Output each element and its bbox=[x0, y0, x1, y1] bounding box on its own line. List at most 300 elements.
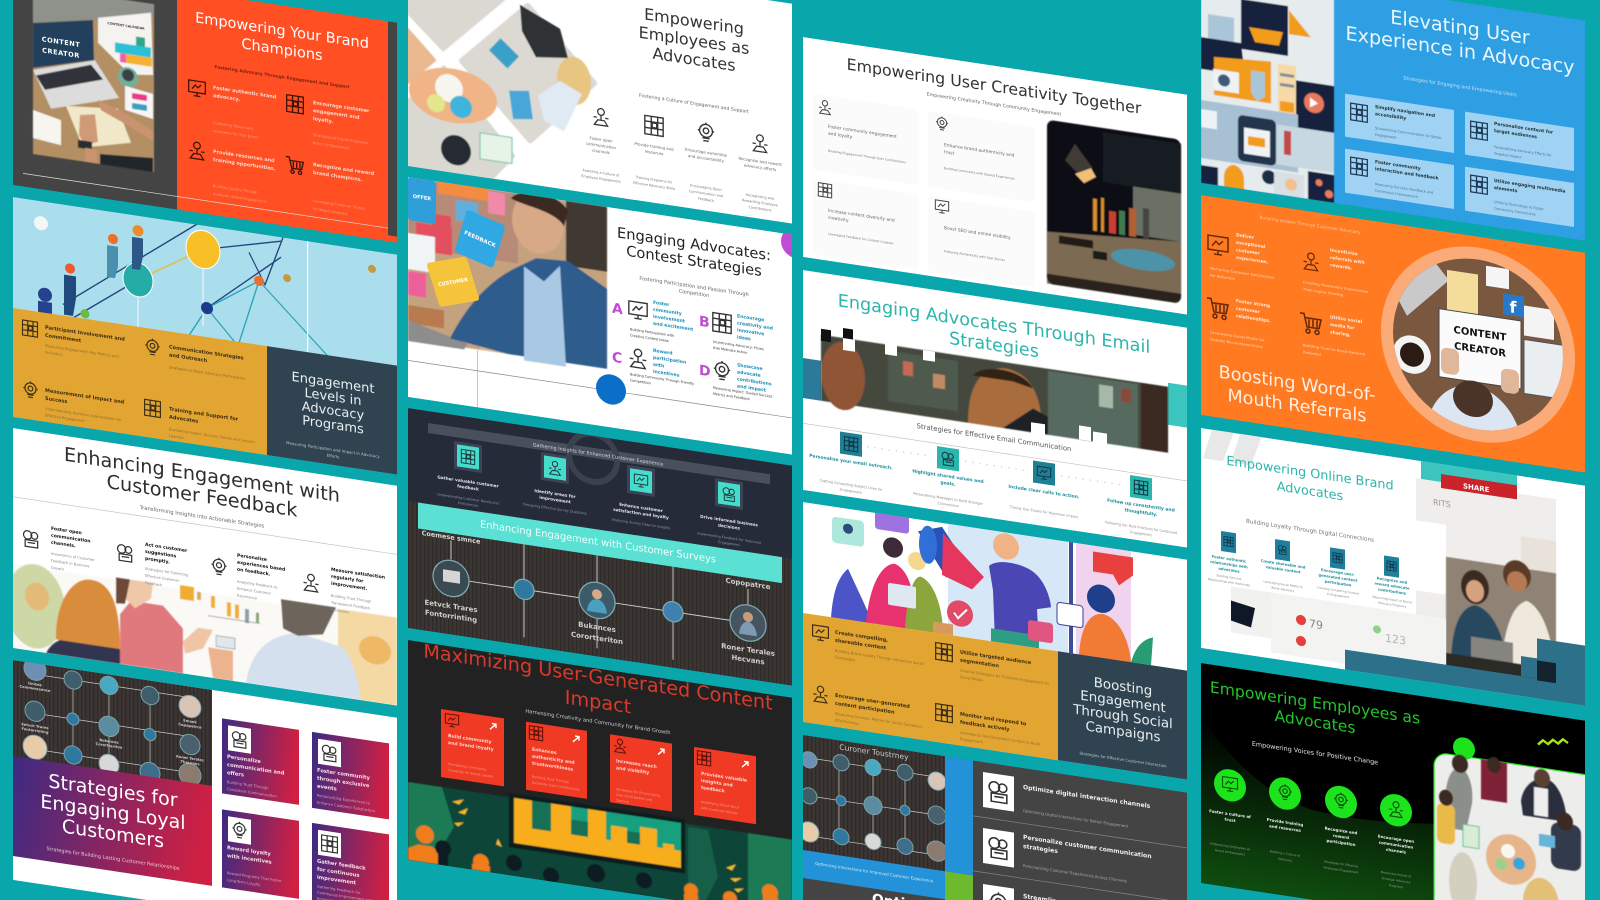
item: personalize outreach: Personalize your email outreach. bbox=[809, 453, 893, 471]
item: recognize: Employee Engagement bbox=[1324, 865, 1359, 875]
photo: customer journey network: Eetvck Trares bbox=[21, 722, 49, 730]
photo: customer journey network: Fontorrinting bbox=[22, 727, 49, 735]
card: brand authenticity: Building Community with Shared Experiences bbox=[944, 166, 1015, 181]
slide: Empowering User Creativity Together bbox=[803, 37, 1187, 315]
photo: people and social metrics: SHARE bbox=[1463, 481, 1490, 494]
item: open communication: Encourage open bbox=[1378, 834, 1414, 844]
item: personalize bbox=[212, 553, 285, 600]
photo: people and social metrics: RITS bbox=[1433, 498, 1451, 509]
photo: customer journey network: Roner Terales bbox=[176, 754, 204, 763]
title: Mouth Referrals bbox=[1228, 386, 1366, 427]
card: SEO bbox=[928, 196, 1035, 288]
card: personalize communication: offers bbox=[227, 770, 244, 779]
panel: title: Customers bbox=[62, 814, 164, 853]
title: Empowering User Creativity Together bbox=[847, 55, 1142, 118]
item B: that Motivate Action bbox=[713, 346, 747, 355]
item: shareable content: Boost Advocacy bbox=[1272, 586, 1295, 593]
card: community engagement bbox=[813, 94, 918, 185]
item: measurement bbox=[23, 381, 124, 422]
card: reach: Increases reach bbox=[616, 758, 657, 770]
card: personalize communication: Personalize bbox=[227, 754, 261, 765]
item: training: Training Programs for bbox=[635, 175, 673, 185]
card: gather feedback: Gather feedback bbox=[317, 859, 366, 872]
card: reach bbox=[610, 734, 672, 812]
item: social sharing: Potential bbox=[1303, 350, 1321, 357]
item B: creativity and bbox=[737, 320, 773, 332]
item A: A bbox=[612, 301, 623, 318]
item C: Building Community Through Friendly bbox=[630, 372, 694, 386]
photo: content creator desk: CONTENT CALENDAR bbox=[107, 21, 145, 31]
item: resources and training: training opportunities. bbox=[213, 157, 276, 172]
item: training: Effective Advocacy Skills bbox=[633, 181, 675, 191]
card: authenticity bbox=[526, 722, 587, 799]
item A: Creative Contest Ideas bbox=[630, 333, 669, 343]
photo: man with feedback tags: OFFER bbox=[413, 194, 431, 202]
slide: Optimizing customer interactions bbox=[799, 734, 1187, 900]
subtitle: Fostering a Culture of Engagement and Support bbox=[639, 93, 749, 115]
item: authentic advocacy: Foster authentic brand bbox=[213, 85, 277, 101]
item: recognize: Recognizing and bbox=[746, 193, 774, 201]
item: communication bbox=[145, 338, 245, 381]
card: authenticity: authenticity and bbox=[532, 754, 575, 766]
card: target audiences: target audiences bbox=[1494, 128, 1537, 140]
photo: team in rounded diamonds bbox=[408, 0, 598, 179]
photo: content creator desk: CREATOR bbox=[42, 46, 80, 60]
item: user generated: to Engagement bbox=[1327, 592, 1350, 599]
item: drive decisions: Drive informed business bbox=[700, 514, 758, 528]
item: open channels: Foster open bbox=[590, 135, 613, 144]
item D: and impact bbox=[737, 383, 767, 394]
item: user generated: Measuring Success: Metrics for Social Campaign bbox=[835, 712, 922, 729]
item: audience segmentation: Social Media bbox=[960, 675, 983, 682]
photo: customer journey network: Corortteriton bbox=[96, 742, 123, 750]
item B bbox=[699, 308, 773, 359]
item: social sharing: Building Trust to Boost Referral bbox=[1303, 343, 1365, 357]
card: insights: Provides valuable bbox=[701, 771, 747, 784]
item: training: Provide training and bbox=[634, 141, 674, 152]
card: multimedia: elements bbox=[1494, 185, 1518, 194]
item: identify areas: Designing Effective Survey Questions bbox=[523, 502, 587, 516]
card: content diversity bbox=[813, 178, 918, 270]
photo: customer journey network: Commeresence bbox=[20, 684, 51, 693]
slide: Maximizing User-Generated Content Impact bbox=[408, 637, 792, 900]
item C: Reward bbox=[653, 348, 673, 357]
item: personalize: experiences based bbox=[237, 560, 285, 573]
card: target audiences: Personalize content for bbox=[1494, 121, 1554, 136]
item: recognize: Contributions bbox=[749, 205, 772, 213]
subtitle: Building Loyalty Through Digital Connections bbox=[1246, 519, 1374, 544]
card: community interaction: Measuring Success: Feedback and bbox=[1375, 182, 1433, 195]
panel: title bbox=[267, 346, 397, 475]
background: green curve bbox=[1201, 718, 1441, 900]
card: community engagement: Foster community engagement bbox=[828, 124, 897, 140]
item: ownership: Encouraging Open bbox=[690, 183, 722, 192]
photo: journey network: Copopatrce bbox=[725, 576, 771, 591]
item: open communication: Feedback in Business bbox=[51, 559, 90, 568]
item: follow up bbox=[1105, 471, 1177, 541]
item D: Showcase bbox=[737, 362, 763, 372]
panel: amber items bbox=[803, 613, 1058, 760]
item D: Metrics and Feedback bbox=[713, 392, 750, 401]
item: open communication: Foster open bbox=[51, 526, 82, 536]
item: exceptional experiences: for Referrals bbox=[1210, 273, 1235, 281]
item: recognize: Rewarding Employee bbox=[742, 198, 778, 207]
item: user generated: Effectiveness bbox=[835, 718, 859, 726]
item: open communication bbox=[22, 526, 95, 570]
decoration: blue circle bbox=[596, 372, 626, 407]
item: shareable content: valuable content bbox=[1265, 565, 1301, 574]
card: exclusive events: events bbox=[317, 784, 337, 793]
card: insights: Amplifying Brand Voice bbox=[701, 800, 739, 810]
item: user generated bbox=[1317, 545, 1360, 601]
item: ownership: and accountability bbox=[688, 153, 725, 163]
item: personalize: Enhance Customer bbox=[237, 587, 272, 596]
item: act on suggestions: promptly. bbox=[145, 556, 170, 566]
item: recognize: reward advocate bbox=[1374, 582, 1410, 591]
item: recognize: Advocacy Programs bbox=[1378, 601, 1407, 609]
item C: Competition bbox=[630, 378, 651, 385]
item: open communication: communication bbox=[51, 533, 91, 545]
card: navigation bbox=[1345, 94, 1454, 153]
item: social sharing: Utilize social bbox=[1330, 314, 1363, 325]
card: community interaction: interaction and feedback bbox=[1375, 166, 1440, 182]
card: community interaction: Foster community bbox=[1375, 159, 1421, 172]
title: Employees as bbox=[639, 23, 749, 58]
photo: journey network: Corortteriton bbox=[571, 629, 623, 646]
card: personalize communication: Building Trust Through bbox=[227, 780, 269, 790]
title: Customer Feedback bbox=[107, 470, 298, 522]
slide: Empowering Employees as Advocates bbox=[408, 0, 792, 224]
item B: innovative bbox=[737, 327, 764, 337]
item: recognize champions bbox=[286, 156, 375, 220]
item: open channels: communication bbox=[586, 141, 617, 150]
item: engagement and loyalty: Encourage customer bbox=[313, 100, 370, 115]
item: drive decisions: decisions bbox=[718, 523, 741, 531]
item: monitor feedback: Leveraging User-Generated Content to Build bbox=[960, 731, 1040, 747]
item: compelling content bbox=[813, 625, 924, 673]
title: Enhancing Engagement with bbox=[64, 443, 340, 507]
item: open communication: channels bbox=[1386, 847, 1407, 855]
card: personalize communication bbox=[222, 718, 299, 805]
card: navigation: accessibility bbox=[1375, 111, 1406, 122]
item: participant involvement: Participant Involvement and bbox=[45, 325, 125, 343]
photo: customer journey network: Curoner Toustrney bbox=[839, 742, 909, 762]
photo: workshop circle bbox=[1434, 733, 1600, 900]
item: culture of trust: Empowering Employees as bbox=[1210, 841, 1251, 851]
panel: title bbox=[13, 756, 212, 886]
item: exceptional experiences: customer bbox=[1236, 247, 1260, 257]
panel: title: Efforts bbox=[327, 453, 339, 459]
item: enhance satisfaction: satisfaction and loyalty bbox=[613, 507, 669, 520]
item: identify areas: improvement bbox=[539, 495, 571, 504]
item: incentivize bbox=[1303, 243, 1368, 301]
panel: amber items bbox=[13, 308, 268, 455]
card: brand authenticity: Enhance brand authenticity and bbox=[944, 142, 1015, 159]
item: authentic relationships: Foster authentic bbox=[1212, 555, 1246, 564]
photo: man with feedback tags bbox=[408, 172, 607, 373]
subtitle: Empowering Creativity Through Community Engagement bbox=[927, 92, 1061, 118]
row: personalize communication: strategies bbox=[1023, 843, 1058, 855]
item: incentivize: referrals with bbox=[1330, 255, 1365, 266]
item: incentivize: Incentivize bbox=[1330, 247, 1358, 257]
item: recognize: Measuring Impact of Brand bbox=[1372, 595, 1412, 605]
title: Contest Strategies bbox=[626, 243, 762, 280]
row: personalize communication: Personalizing Customer Experiences Across Channels bbox=[1023, 863, 1127, 884]
slide: Boosting Word-of-Mouth Referrals bbox=[1201, 195, 1585, 473]
item: ownership: Encourage ownership bbox=[685, 147, 728, 158]
item: audience segmentation: segmentation bbox=[960, 658, 999, 669]
card: content diversity: creativity bbox=[828, 215, 849, 224]
photo: customer journey network: Copopatrce bbox=[178, 722, 202, 730]
item: communication: Communication Strategies bbox=[169, 344, 244, 362]
title: Advocates bbox=[652, 44, 736, 75]
item: audience segmentation bbox=[936, 643, 1049, 692]
decoration: zigzag bbox=[1538, 736, 1568, 749]
item: participant involvement bbox=[22, 319, 124, 358]
item: compelling content: shareable content bbox=[835, 638, 887, 652]
item: open channels: channels bbox=[592, 148, 610, 155]
illustration: people with megaphone bbox=[831, 504, 1153, 666]
card: exclusive events: through exclusive bbox=[317, 776, 370, 790]
title: Elevating User bbox=[1390, 5, 1530, 49]
item: ownership: Feedback bbox=[698, 197, 714, 203]
item: measure satisfaction: improvement. bbox=[331, 581, 367, 592]
card: authenticity: Building Trust Through bbox=[532, 775, 569, 784]
item: open channels: Employee Engagement bbox=[581, 174, 621, 184]
item: culture of trust: Brand Ambassadors bbox=[1215, 848, 1245, 857]
subtitle: Boosting Growth Through Customer Advocacy bbox=[1259, 215, 1361, 236]
photo: journey network: Coemese smnce bbox=[422, 529, 481, 546]
item: drive decisions bbox=[697, 475, 761, 550]
item: exceptional experiences: Deliver bbox=[1236, 232, 1255, 241]
photo: people and social metrics bbox=[1231, 432, 1556, 695]
item: user generated: generated content bbox=[1319, 573, 1358, 583]
subtitle: Competition bbox=[679, 289, 709, 299]
item: identify areas: Identify areas for bbox=[534, 488, 576, 499]
slide: Elevating User Experience in Advocacy bbox=[1201, 0, 1585, 241]
panel: title: Programs bbox=[302, 413, 364, 438]
panel: title: Measuring Participation and Impact in Advocacy bbox=[286, 440, 380, 459]
title: Maximizing User-Generated Content bbox=[423, 639, 773, 715]
item: incentivize: Creating Memorable Experiences bbox=[1303, 280, 1368, 294]
item: recognize champions: for Brand Advocacy bbox=[313, 207, 349, 216]
card: community: Harnessing Community bbox=[448, 762, 486, 772]
item: resources and training bbox=[190, 141, 276, 205]
photo: content creator desk bbox=[33, 0, 154, 172]
item: identify areas bbox=[523, 449, 587, 516]
item: gather feedback: Gather valuable customer bbox=[437, 474, 500, 489]
item: authentic advocacy: advocacy. bbox=[213, 93, 240, 103]
item: recognize champions: Recognize and reward bbox=[313, 162, 375, 177]
item: training: resources bbox=[645, 149, 663, 156]
slide: Enhancing Engagement with Customer Surveys bbox=[408, 406, 792, 686]
item: engagement and loyalty bbox=[287, 95, 370, 154]
item: social sharing bbox=[1300, 310, 1365, 364]
item: training: Training and Support for bbox=[169, 406, 239, 423]
panel: title: Strategies for Building Lasting Customer Relationships bbox=[46, 846, 180, 872]
item: recognize bbox=[1372, 554, 1412, 610]
item: enhance satisfaction bbox=[612, 463, 671, 530]
item: enhance satisfaction: Enhance customer bbox=[619, 502, 664, 513]
item C: incentives bbox=[653, 369, 680, 379]
band: survey title: Enhancing Engagement with Customer Surveys bbox=[480, 519, 716, 566]
card: gather feedback bbox=[312, 823, 389, 900]
item: monitor feedback: Engagement bbox=[960, 737, 983, 745]
item: gather feedback: feedback bbox=[457, 483, 479, 492]
illustration: jungle audience with chart bbox=[408, 778, 792, 900]
card: insights: insights and bbox=[701, 778, 733, 789]
slide: Strategies for Engaging Loyal Customers bbox=[13, 655, 397, 900]
item: relationships bbox=[1207, 294, 1271, 351]
panel: title: Strategies for Effective Customer Interaction bbox=[1079, 750, 1167, 769]
item: gather feedback: Preferences bbox=[458, 501, 478, 508]
card: reward loyalty: Reward loyalty bbox=[227, 845, 271, 858]
card: target audiences: Targeted Impact bbox=[1493, 151, 1522, 160]
item: follow up: thoughtfully. bbox=[1125, 507, 1158, 518]
item: relationships: relationships. bbox=[1236, 313, 1271, 325]
decoration: grey quote mark bbox=[1203, 418, 1265, 468]
item: exceptional experiences bbox=[1208, 228, 1274, 287]
photo: man with feedback tags: CUSTOMER bbox=[438, 277, 469, 288]
item: training: Advocacy bbox=[1278, 857, 1292, 863]
item: follow up: Following Up: Best Practices for Continued bbox=[1105, 520, 1177, 535]
photo: journey network: Hecvans bbox=[731, 653, 765, 666]
item: culture of trust bbox=[1209, 766, 1251, 858]
item: follow up: Engagement bbox=[1130, 530, 1152, 537]
title: Advocates bbox=[1275, 706, 1355, 737]
column 4 bbox=[1201, 0, 1600, 900]
card: navigation: Engagement bbox=[1375, 133, 1397, 140]
card: community engagement: Boosting Engagement Through User Contributions bbox=[828, 149, 906, 164]
panel: title: Strategies for bbox=[48, 769, 178, 812]
item: authentic relationships: Relationships with Advocates bbox=[1208, 577, 1251, 587]
item: training bbox=[633, 114, 675, 191]
item: incentivize: That Inspire Sharing bbox=[1303, 287, 1344, 297]
item: training: Advocates bbox=[169, 414, 198, 425]
item: open communication: channels. bbox=[51, 540, 76, 549]
bottom colour blocks bbox=[1345, 610, 1585, 706]
item: relationships: customer bbox=[1236, 306, 1260, 315]
photo: circular desk with content creator bbox=[1381, 233, 1575, 456]
item: measurement: Effective Engagement bbox=[45, 413, 85, 423]
item: training: Evaluating Impact: Success Stories and Lessons bbox=[169, 427, 255, 444]
card: reach: Sharing bbox=[616, 798, 629, 804]
column 3 bbox=[799, 37, 1187, 900]
panel: title: Campaigns bbox=[1085, 718, 1161, 746]
item: compelling content: Campaigns bbox=[835, 655, 855, 662]
card: insights: feedback bbox=[701, 785, 726, 795]
photo: analyst with email visuals bbox=[803, 318, 1187, 462]
title: Empowering Your Brand bbox=[195, 9, 369, 52]
card: gather feedback: for continuous bbox=[317, 867, 360, 879]
item: recognize bbox=[1324, 783, 1359, 875]
item: personalize: Experience bbox=[237, 594, 258, 601]
card: multimedia: Utilizing Technology to Foster bbox=[1494, 200, 1544, 211]
card: exclusive events bbox=[312, 732, 389, 819]
item: act on suggestions: Strategies for Collecting bbox=[145, 567, 188, 577]
item: shared values bbox=[912, 442, 984, 512]
item: engagement and loyalty: loyalty. bbox=[313, 116, 333, 125]
illustration: media collage bbox=[1201, 0, 1334, 203]
item: act on suggestions: Effective Customer bbox=[145, 574, 180, 583]
item: shareable content bbox=[1261, 537, 1306, 595]
item: measure satisfaction bbox=[303, 568, 385, 614]
item C: participation bbox=[653, 355, 686, 366]
item: training: and resources bbox=[1269, 823, 1302, 833]
card: insights: with Customer Stories bbox=[701, 806, 738, 815]
card: multimedia bbox=[1465, 167, 1574, 227]
item: recognize: Recognize and bbox=[1377, 576, 1408, 585]
photo: customer journey network bbox=[13, 655, 212, 792]
item: relationships: Foster strong bbox=[1236, 298, 1270, 309]
slide: Engagement Levels in Advocacy Programs bbox=[13, 192, 397, 475]
item: act on suggestions: Act on customer bbox=[145, 542, 188, 554]
item A: involvement bbox=[653, 314, 686, 325]
item: monitor feedback: Monitor and respond to bbox=[960, 712, 1027, 728]
subtitle: Harnessing Creativity and Community for Brand Growth bbox=[525, 709, 671, 736]
item: resources and training: Authentic Brand Engagement bbox=[213, 192, 267, 204]
card: community: Build community bbox=[448, 733, 491, 746]
card: reward loyalty: Long-Term Loyalty bbox=[227, 878, 261, 887]
item: training bbox=[144, 398, 256, 444]
photo: circular desk with content creator: f bbox=[1510, 297, 1517, 317]
item: recognize: Recognize and reward bbox=[738, 156, 782, 167]
item: user generated bbox=[813, 685, 922, 735]
item: recognize champions: Leveraging Customer Stories bbox=[313, 199, 365, 211]
item B: Encourage bbox=[737, 313, 764, 323]
item: authentic relationships: advocates bbox=[1218, 567, 1240, 574]
item: user generated: Encourage user- bbox=[1321, 568, 1355, 577]
item: engagement and loyalty: engagement and bbox=[313, 108, 360, 121]
slide: Engaging Advocates Through Email Strategies bbox=[803, 270, 1187, 548]
item: calls to action: Timing Your Emails for Maximum Impact bbox=[1009, 505, 1079, 519]
subtitle: Fostering Advocacy Through Engagement and Support bbox=[214, 64, 350, 90]
card: community interaction: Continuous Improvement bbox=[1375, 189, 1419, 199]
slide: Engaging Advocates Contest Strategies bbox=[408, 170, 811, 457]
item A: community bbox=[653, 307, 682, 317]
item: open communication: Programs bbox=[1389, 883, 1403, 889]
item: recognize champions: brand champions. bbox=[313, 170, 362, 183]
item: personalize outreach: Crafting Compelling Subject Lines for bbox=[819, 478, 883, 492]
item: personalize: on feedback. bbox=[237, 567, 271, 578]
title: Impact bbox=[565, 686, 632, 719]
item: measure satisfaction: Measure satisfaction bbox=[331, 567, 385, 581]
row: digital channels bbox=[983, 772, 1151, 832]
item: recognize: Recognize and bbox=[1325, 826, 1358, 835]
card: community: Creativity for Brand Growth bbox=[448, 768, 493, 779]
item: personalize outreach bbox=[809, 427, 893, 499]
photo: journey network: Bukances bbox=[578, 620, 616, 634]
card: navigation: Simplify navigation and bbox=[1375, 104, 1435, 119]
card: gather feedback: improvement bbox=[317, 875, 357, 887]
item: measure satisfaction: Transparent Feedback bbox=[330, 601, 371, 611]
title: Experience in Advocacy bbox=[1346, 22, 1574, 79]
photo: customer journey network bbox=[799, 734, 947, 872]
item: calls to action: Include clear calls to action. bbox=[1008, 484, 1080, 501]
column 1 bbox=[5, 0, 397, 900]
item: training bbox=[1267, 775, 1303, 864]
card: brand authenticity bbox=[928, 111, 1035, 203]
card: SEO: Fostering Authenticity with Seal Stories bbox=[944, 249, 1005, 262]
item: compelling content: Building Brand Loyalty Through Interactive Social bbox=[835, 649, 924, 666]
item: authentic advocacy: Cultivating Passionate bbox=[213, 121, 254, 131]
column 2 bbox=[408, 0, 792, 900]
item: training: Building a Culture of bbox=[1270, 849, 1301, 858]
item: open communication: Measuring Impact of bbox=[1381, 870, 1412, 879]
title: Boosting Word-of- bbox=[1219, 363, 1375, 406]
illustration: customers talking bbox=[5, 558, 397, 706]
item: enhance satisfaction: Analyzing Survey Data for Insights bbox=[612, 518, 671, 530]
